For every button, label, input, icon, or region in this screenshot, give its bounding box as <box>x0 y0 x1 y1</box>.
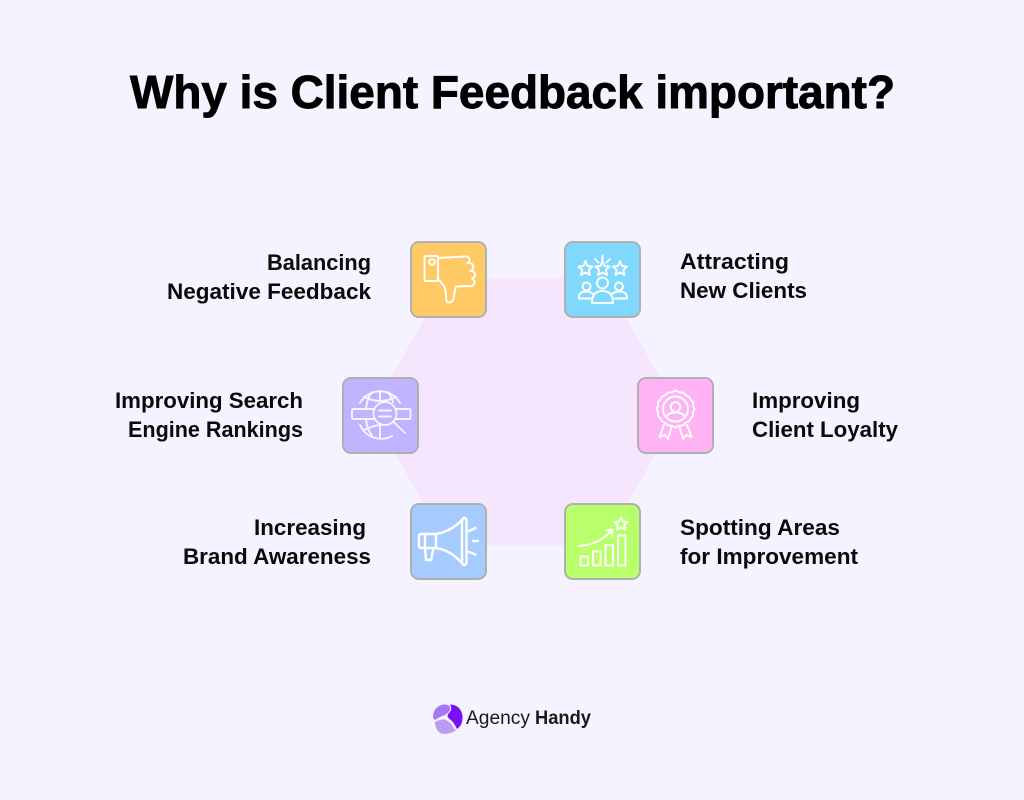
item: attracting new clients <box>565 242 807 317</box>
label: attracting new clients: New Clients <box>680 278 807 303</box>
icon: thumbs down <box>424 256 475 303</box>
label: increasing brand awareness: Increasing <box>254 515 366 540</box>
label: improving search engine rankings: Improving Search <box>115 388 303 413</box>
item: balancing negative feedback <box>167 242 486 317</box>
label: balancing negative feedback <box>167 250 371 304</box>
central hexagon <box>371 278 680 546</box>
label: increasing brand awareness: Brand Awareness <box>183 544 371 569</box>
item: spotting areas for improvement <box>565 504 859 579</box>
card: sky blue <box>565 242 640 317</box>
title: Why is Client Feedback important? <box>130 66 895 118</box>
icon: rated clients <box>578 256 627 303</box>
card: violet <box>343 378 418 453</box>
item: increasing brand awareness <box>183 504 486 579</box>
label: increasing brand awareness <box>183 515 371 569</box>
label: improving search engine rankings: Engine Rankings <box>128 417 303 442</box>
item: improving search engine rankings <box>115 378 418 453</box>
label: attracting new clients: Attracting <box>680 249 789 274</box>
card: pink <box>638 378 713 453</box>
logo mark <box>433 704 463 734</box>
logo wordmark: Agency <box>466 708 531 729</box>
logo wordmark: Handy <box>535 708 591 729</box>
label: attracting new clients <box>680 249 807 303</box>
icon: megaphone <box>419 518 478 565</box>
label: balancing negative feedback: Negative Feedback <box>167 279 371 304</box>
label: spotting areas for improvement: Spotting Areas <box>680 515 840 540</box>
label: spotting areas for improvement <box>680 515 859 569</box>
icon: loyalty badge <box>656 390 694 439</box>
icon: growth chart <box>578 518 628 566</box>
label: spotting areas for improvement: for Improvement <box>680 544 859 569</box>
logo: Agency Handy <box>433 704 591 734</box>
label: improving client loyalty <box>752 388 898 442</box>
label: improving search engine rankings <box>115 388 303 442</box>
label: improving client loyalty: Client Loyalty <box>752 417 898 442</box>
label: balancing negative feedback: Balancing <box>267 250 371 275</box>
card: light blue <box>411 504 486 579</box>
label: improving client loyalty: Improving <box>752 388 860 413</box>
card: orange <box>411 242 486 317</box>
item: improving client loyalty <box>638 378 898 453</box>
icon: search globe <box>352 391 410 439</box>
card: lime <box>565 504 640 579</box>
